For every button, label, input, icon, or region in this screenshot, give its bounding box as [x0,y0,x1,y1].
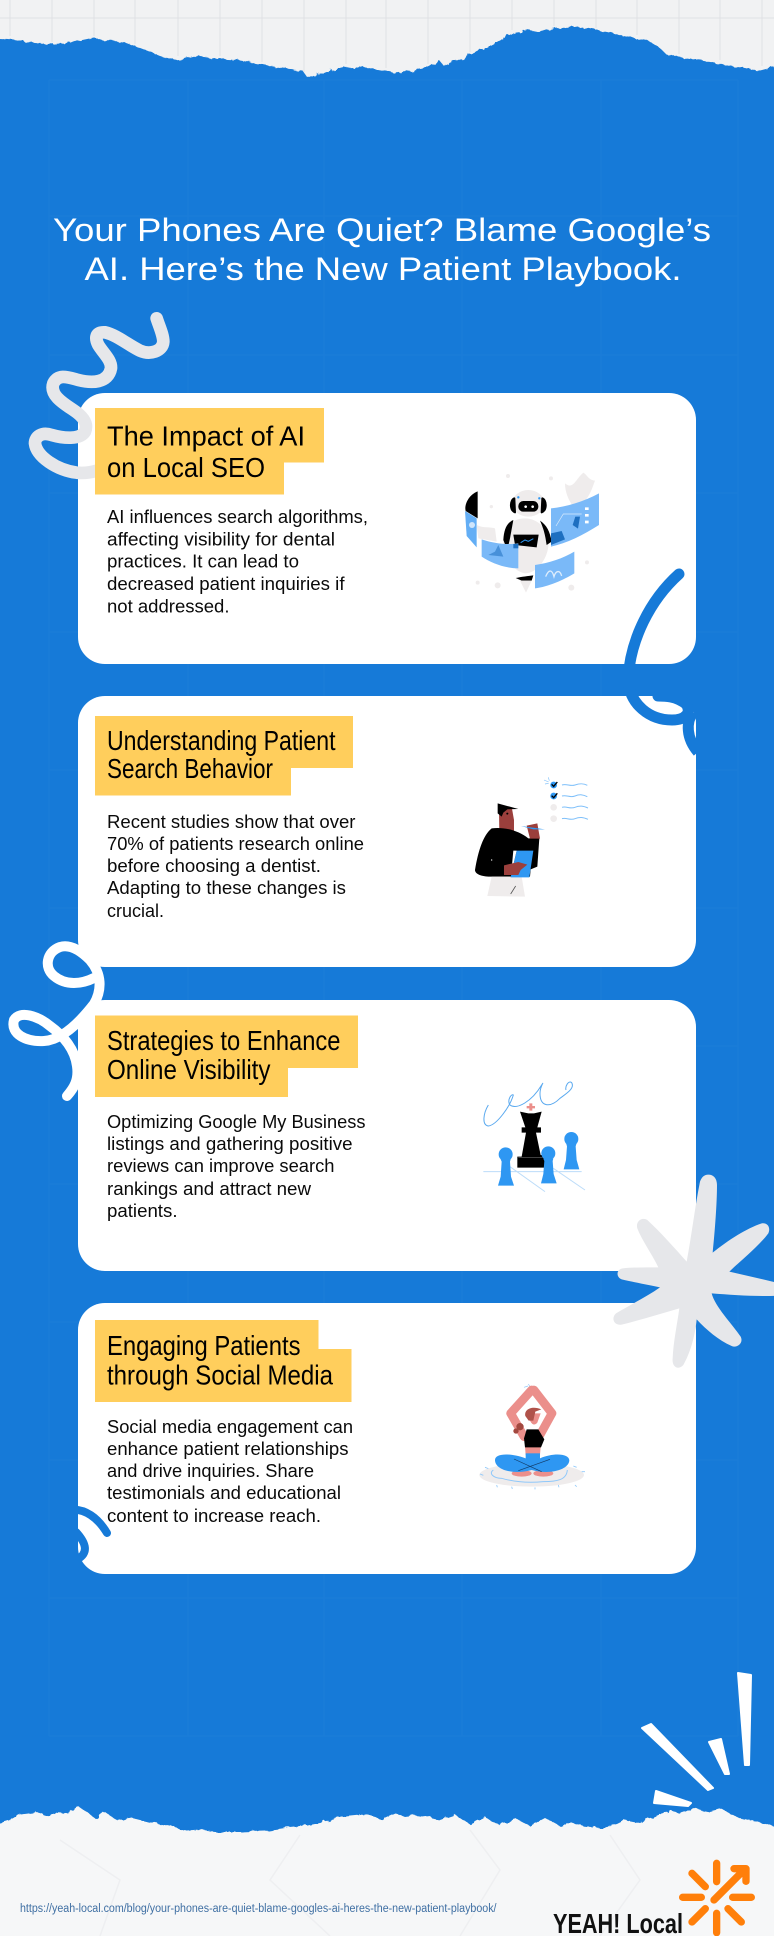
body text [107,812,364,921]
icon: orange starburst with arrow [683,1863,751,1933]
body text: not addressed. [107,596,230,616]
body text: Optimizing Google My Business [107,1112,366,1132]
body text [107,507,368,616]
heading block: on Local SEO [107,452,265,483]
decoration: white loops [13,946,100,1096]
decoration: white sparks [642,1673,751,1806]
heading block: Search Behavior [107,753,273,784]
heading block: Engaging Patients [107,1330,300,1361]
panel: strategies to enhance online visibility [78,1000,696,1271]
body text: and drive inquiries. Share [107,1461,314,1481]
body text: Adapting to these changes is [107,878,346,898]
decoration: blue curl between cards one and two [628,574,698,752]
panel: the impact of AI [78,393,696,664]
icon: chess king and pawns [483,1082,585,1192]
body text: practices. It can lead to [107,552,299,572]
body text: content to increase reach. [107,1506,321,1526]
body text: crucial. [107,901,164,921]
body text [107,1417,353,1526]
body text: Social media engagement can [107,1417,353,1437]
body text: listings and gathering positive [107,1134,352,1154]
body text: Recent studies show that over [107,812,356,832]
heading block [95,1320,352,1402]
icon: woman meditating [479,1384,585,1489]
heading block [95,1016,358,1097]
heading block: Understanding Patient [107,725,336,756]
body text [107,1112,366,1221]
body text: decreased patient inquiries if [107,574,346,594]
body text: before choosing a dentist. [107,856,321,876]
body text: reviews can improve search [107,1156,334,1176]
source url: https://yeah-local.com/blog/your-phones-are-quiet-blame-googles-ai-heres-the-new-patient-playbook/ [20,1903,497,1915]
heading block: through Social Media [107,1360,334,1390]
body text: AI influences search algorithms, [107,507,368,527]
body text: enhance patient relationships [107,1439,348,1459]
heading block: Strategies to Enhance [107,1025,340,1056]
title: AI. Here’s the New Patient Playbook. [84,251,682,287]
heading block: The Impact of AI [107,420,305,452]
icon: man with checklist [475,777,588,897]
logo: yeah local [553,1863,751,1936]
decoration: small blue curl [70,1510,107,1559]
torn paper: top [0,0,774,78]
heading block [95,716,353,796]
icon: robot with data panels [465,473,599,593]
body text: 70% of patients research online [107,834,364,854]
body text: testimonials and educational [107,1483,341,1503]
panel: understanding patient search behavior [78,696,696,967]
title [53,212,711,287]
title: Your Phones Are Quiet? Blame Google’s [53,212,711,248]
heading block [95,408,324,494]
torn paper: bottom [0,1806,774,1936]
decoration: grey squiggle [35,318,163,473]
body text: patients. [107,1201,178,1221]
body text: affecting visibility for dental [107,530,335,550]
panel: engaging patients through social media [78,1303,696,1574]
heading block: Online Visibility [107,1054,271,1085]
body text: rankings and attract new [107,1179,312,1199]
decoration: grey star [613,1175,774,1368]
